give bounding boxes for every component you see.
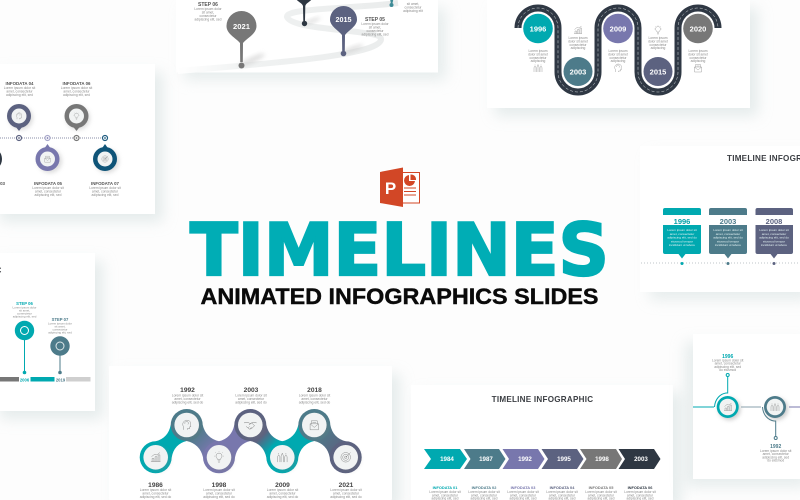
labels: 2009	[275, 482, 290, 489]
chevrons: 2003	[634, 456, 648, 463]
text blocks: adipiscing	[571, 46, 585, 50]
labels: adipiscing elit, sed	[92, 193, 119, 197]
text blocks: consectetur	[689, 56, 707, 60]
chain links	[156, 425, 346, 457]
labels: INFODATA 02	[472, 485, 497, 490]
labels: 1986	[148, 482, 163, 489]
labels: 1992	[180, 387, 195, 394]
step 06: consectetur	[17, 312, 32, 316]
card: 1996: incididunt ut labore	[669, 243, 695, 247]
step 06: STEP 06	[16, 301, 34, 306]
text blocks: consectetur	[609, 56, 627, 60]
text blocks: Lorem ipsum	[648, 36, 668, 40]
node: 1992: amet, consectetur	[763, 452, 790, 456]
labels	[429, 485, 656, 500]
labels: amet, consectetur	[63, 89, 90, 93]
stop: 2015	[642, 55, 674, 87]
labels: Lorem ipsum dolor sit	[507, 490, 539, 494]
node: 1996: adipiscing elit, sed	[714, 365, 741, 369]
labels: 2018	[307, 387, 322, 394]
node: 2003	[234, 409, 266, 441]
text blocks: consectetur	[529, 56, 547, 60]
labels: amet, consectetur	[627, 493, 654, 497]
labels: amet, consectetur	[174, 397, 201, 401]
title: TIMELINES	[190, 208, 609, 292]
icon: PowerPoint logo: P	[385, 179, 396, 198]
step 07: Lorem ipsum dolor	[48, 322, 72, 326]
card: 2008: incididunt ut labore	[761, 243, 787, 247]
step 06	[13, 301, 37, 374]
labels: Lorem ipsum dolor sit	[624, 490, 656, 494]
stop: 1996: 1996	[530, 24, 546, 34]
card: 1996: Lorem ipsum dolor sit	[667, 228, 697, 232]
labels: adipiscing elit, sed	[63, 93, 90, 97]
card: 2003: adipiscing elit, sed do	[713, 236, 743, 240]
pin: 2021	[226, 11, 266, 69]
labels: adipiscing elit, sed	[35, 193, 62, 197]
stop: 2015: 2015	[650, 68, 666, 76]
card: 1996	[663, 208, 701, 265]
labels: adipiscing elit, sed	[6, 93, 33, 97]
labels: Lorem ipsum dolor sit	[468, 490, 500, 494]
labels: amet, consectetur	[206, 492, 233, 496]
label: step 05: adipiscing elit, sed	[362, 32, 389, 36]
labels: amet, consectetur	[549, 493, 576, 497]
panel: chevron timeline	[411, 385, 681, 500]
step 07	[48, 317, 72, 374]
labels: Lorem ipsum dolor sit	[267, 488, 298, 492]
icons	[534, 25, 702, 72]
text blocks: Lorem ipsum	[608, 49, 628, 53]
labels: Lorem ipsum dolor sit	[429, 490, 461, 494]
label: step 06	[194, 2, 223, 22]
card: 1996: eiusmod tempor	[671, 239, 693, 243]
text blocks: dolor sit amet	[568, 39, 588, 43]
text blocks	[528, 36, 708, 63]
pin: 2021: 2021	[233, 22, 251, 31]
card: 1996: amet, consectetur	[670, 232, 694, 236]
labels: INFODATA 05	[589, 485, 614, 490]
label: step 06: Lorem ipsum dolor	[194, 7, 223, 11]
node: 1996: amet, consectetur	[715, 362, 742, 366]
step 07: sit amet,	[55, 324, 66, 328]
labels: amet, consectetur	[269, 492, 296, 496]
step 07: STEP 07	[52, 317, 69, 322]
year bar	[0, 377, 90, 382]
panel: steps timeline	[0, 253, 103, 419]
text blocks: dolor sit amet	[608, 52, 628, 56]
subtitle: ANIMATED INFOGRAPHICS SLIDES	[200, 284, 598, 309]
labels: Lorem ipsum dolor sit	[585, 490, 617, 494]
labels: INFODATA 01	[433, 485, 458, 490]
labels: adipiscing elit, sed do	[203, 495, 235, 499]
labels: amet, consectetur	[238, 397, 265, 401]
labels: Lorem ipsum dolor sit	[203, 488, 235, 492]
card: 2003: Lorem ipsum dolor sit	[713, 228, 743, 232]
label: step 06: sit amet,	[202, 10, 214, 14]
labels: adipiscing elit, sed do	[140, 495, 171, 499]
labels	[0, 81, 121, 197]
panel: timeline cards	[640, 146, 800, 300]
card: 2008: adipiscing elit, sed do	[759, 236, 789, 240]
card: 2008: eiusmod tempor	[763, 239, 785, 243]
pin: infodata 04	[7, 104, 33, 131]
chevrons: 1987	[479, 456, 493, 463]
text blocks: adipiscing	[651, 46, 665, 50]
labels: Lorem ipsum dolor sit	[172, 394, 203, 398]
labels: INFODATA 07	[91, 181, 120, 186]
chevrons: 1998	[595, 456, 609, 463]
labels: 2003	[244, 387, 259, 394]
labels: amet, consectetur	[35, 189, 62, 193]
step 07: adipiscing elit, sed	[48, 330, 72, 334]
panel: circle line timeline	[685, 334, 800, 487]
year bar: 2006	[20, 377, 30, 382]
labels: 1998	[212, 482, 227, 489]
labels: 2021	[339, 482, 354, 489]
label: step 04 partial: sit amet,	[407, 2, 419, 6]
pin: 2015	[330, 6, 364, 56]
labels: amet, consectetur	[510, 493, 537, 497]
node: 1992	[171, 409, 203, 441]
labels: adipiscing elit, sed do	[235, 400, 267, 404]
labels: Lorem ipsum dolor sit	[299, 394, 330, 398]
panel: road timeline with pins	[176, 0, 446, 80]
labels: INFODATA 06	[63, 81, 91, 86]
step 06: Lorem ipsum dolor	[13, 306, 36, 310]
pin: teal	[390, 0, 394, 7]
card: 1996: 1996	[674, 217, 690, 226]
label: step 05: sit amet,	[369, 26, 381, 30]
node: 2021	[330, 441, 362, 473]
text blocks: Lorem ipsum	[688, 49, 708, 53]
label: step 05: STEP 05	[365, 17, 385, 23]
pin: infodata 06	[64, 104, 90, 131]
labels: adipiscing elit, sed do	[299, 400, 330, 404]
axis nodes	[16, 136, 108, 140]
card: 2003: 2003	[720, 217, 736, 226]
labels: adipiscing elit, sed do	[172, 400, 203, 404]
labels: amet, consectetur	[301, 397, 328, 401]
node: 1996: 1996	[722, 354, 733, 360]
label: step 04 partial: consectetur	[404, 6, 422, 10]
winding road	[178, 3, 398, 71]
labels: Lorem ipsum dolor sit	[330, 488, 362, 492]
dotted axis	[0, 137, 105, 139]
stop: 2020	[682, 12, 714, 44]
text blocks: dolor sit amet	[688, 52, 708, 56]
labels: INFODATA 03	[511, 485, 536, 490]
node: 1992: Lorem ipsum dolor sit	[760, 449, 791, 453]
icon: PowerPoint logo	[380, 168, 420, 207]
stop: 2009: 2009	[610, 24, 626, 34]
node: 1996	[712, 354, 744, 420]
node: 1998	[203, 441, 235, 473]
node: 1986	[140, 441, 172, 473]
labels: amet, consectetur	[92, 189, 119, 193]
chevrons: 1984	[440, 456, 454, 463]
stop: 2009	[602, 12, 634, 44]
node: 1992	[760, 396, 792, 463]
label: step 06: consectetur	[199, 14, 217, 18]
labels: Lorem ipsum dolor sit	[546, 490, 578, 494]
text blocks: Lorem ipsum	[528, 49, 548, 53]
labels: Lorem ipsum dolor sit	[61, 86, 92, 90]
text blocks: dolor sit amet	[648, 39, 668, 43]
panel: winding road timeline	[487, 0, 758, 116]
labels: INFODATA 04	[6, 81, 34, 86]
labels: adipiscing elit, sed do	[330, 495, 362, 499]
label: step 06: adipiscing elit, sed	[195, 18, 222, 22]
node: 1992: 1992	[770, 444, 781, 450]
card: 2008: amet, consectetur	[762, 232, 786, 236]
pin: infodata 07	[93, 144, 119, 173]
panel: infodata pins timeline	[0, 64, 163, 222]
pin: 2015: 2015	[336, 15, 352, 24]
labels: amet, consectetur	[142, 492, 169, 496]
label: step 04 partial: adipiscing elit	[403, 9, 423, 13]
label: step 06: STEP 06	[198, 2, 218, 8]
labels: Lorem ipsum dolor sit	[4, 86, 35, 90]
labels: Lorem ipsum dolor sit	[89, 186, 121, 190]
labels: amet, consectetur	[432, 493, 459, 497]
chevrons: 1995	[557, 456, 571, 463]
label: step 05: consectetur	[366, 29, 384, 33]
text blocks: dolor sit amet	[528, 52, 548, 56]
text blocks: adipiscing	[691, 59, 705, 63]
card: 2008: 2008	[766, 217, 782, 226]
pin: dark partial	[0, 147, 2, 171]
labels: amet, consectetur	[333, 492, 360, 496]
card: 2003: incididunt ut labore	[715, 243, 741, 247]
card: 1996: adipiscing elit, sed do	[667, 236, 697, 240]
panel: linked circles timeline	[109, 366, 400, 500]
labels: INFODATA 06	[628, 485, 653, 490]
labels: adipiscing elit, sed do	[267, 495, 298, 499]
node: 1992: do eiusmod	[767, 459, 784, 463]
labels	[140, 387, 362, 499]
year bar: 2019	[56, 377, 66, 382]
card: 2008	[756, 208, 793, 265]
card: 2003: amet, consectetur	[716, 232, 740, 236]
heading: TIMELINE INFOGRAPHIC	[492, 395, 593, 404]
node: 1992: adipiscing elit, sed	[762, 455, 789, 459]
road	[518, 8, 718, 92]
step 06: sit amet,	[19, 308, 30, 312]
labels: INFODATA 04	[550, 485, 575, 490]
card: 2003	[709, 208, 747, 265]
text blocks: adipiscing	[611, 59, 625, 63]
card: 2003: eiusmod tempor	[717, 239, 739, 243]
step 06: adipiscing elit, sed	[13, 314, 37, 318]
labels: amet, consectetur	[471, 493, 498, 497]
chevrons: 1992	[518, 456, 532, 463]
node: 1996: do eiusmod	[719, 368, 736, 372]
label: step 05	[361, 17, 390, 36]
node: 2009	[266, 441, 298, 473]
stop: 1996	[522, 12, 554, 44]
stop: 2003: 2003	[570, 68, 586, 76]
stop: 2003	[562, 55, 594, 87]
node: 1996: Lorem ipsum dolor sit	[712, 358, 743, 362]
connector lines	[693, 406, 800, 408]
labels: amet, consectetur	[6, 89, 33, 93]
text blocks: consectetur	[649, 43, 667, 47]
step 07: consectetur	[53, 328, 68, 332]
text blocks: consectetur	[569, 43, 587, 47]
stop: 2020: 2020	[690, 24, 706, 34]
labels: Lorem ipsum dolor sit	[140, 488, 171, 492]
label: step 05: Lorem ipsum dolor	[361, 22, 390, 26]
labels: INFODATA 05	[34, 181, 63, 186]
pin: infodata 05	[36, 144, 62, 173]
text blocks: adipiscing	[531, 59, 545, 63]
card: 2008: Lorem ipsum dolor sit	[759, 228, 789, 232]
chevrons	[424, 449, 660, 469]
dotted axis	[641, 262, 800, 264]
text blocks: Lorem ipsum	[568, 36, 588, 40]
pin: dark	[295, 0, 321, 26]
labels: Lorem ipsum dolor sit	[32, 186, 64, 190]
node: 2018	[298, 409, 330, 441]
labels: Lorem ipsum dolor sit	[235, 394, 267, 398]
labels: amet, consectetur	[588, 493, 615, 497]
